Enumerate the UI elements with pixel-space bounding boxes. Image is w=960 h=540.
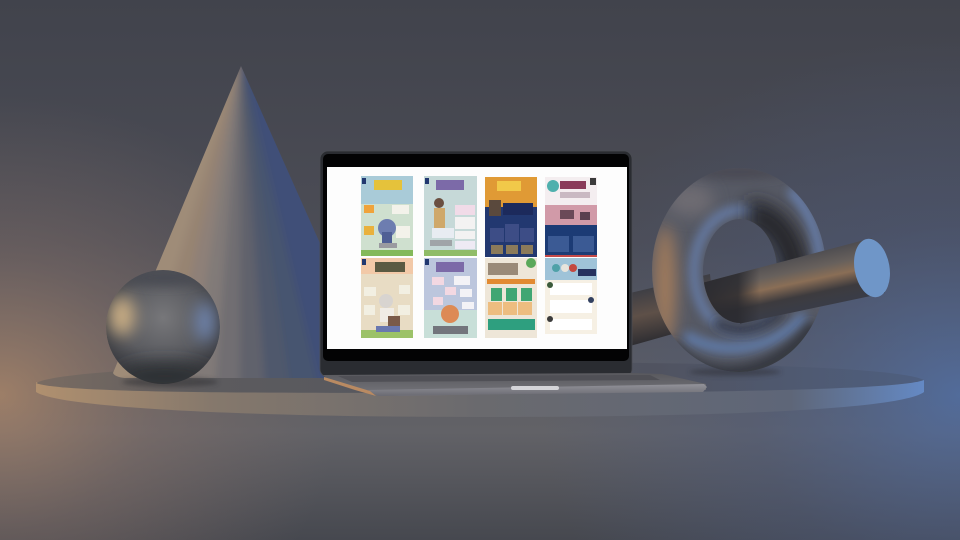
keyboard [338,375,660,382]
torus contact shadow [689,368,781,376]
thumbnail: smart poster [361,176,413,256]
sphere [106,270,220,390]
torus [652,178,824,372]
screen [327,167,627,349]
cone [113,66,326,378]
left edge highlight [324,377,376,396]
cylinder end cap [850,236,894,300]
cylinder rear section [630,274,715,346]
thumbnail: laptop poster [424,258,477,338]
thumbnail: elder poster [361,258,413,338]
platform disc [36,362,924,417]
thumbnail: covid poster [485,258,537,338]
cylinder front section [704,238,885,324]
front edge [368,384,707,396]
thumbnail: VR poster [424,176,477,256]
poster thumbnails [361,176,597,338]
trackpad notch [511,386,559,390]
sphere contact shadow [122,377,218,387]
laptop lid [320,151,632,377]
laptop base [323,373,706,396]
thumbnail: pink and navy poster [545,177,597,257]
laptop [320,151,707,396]
thumbnail: navy and orange poster [485,177,537,257]
thumbnail: mindset poster [545,258,597,334]
